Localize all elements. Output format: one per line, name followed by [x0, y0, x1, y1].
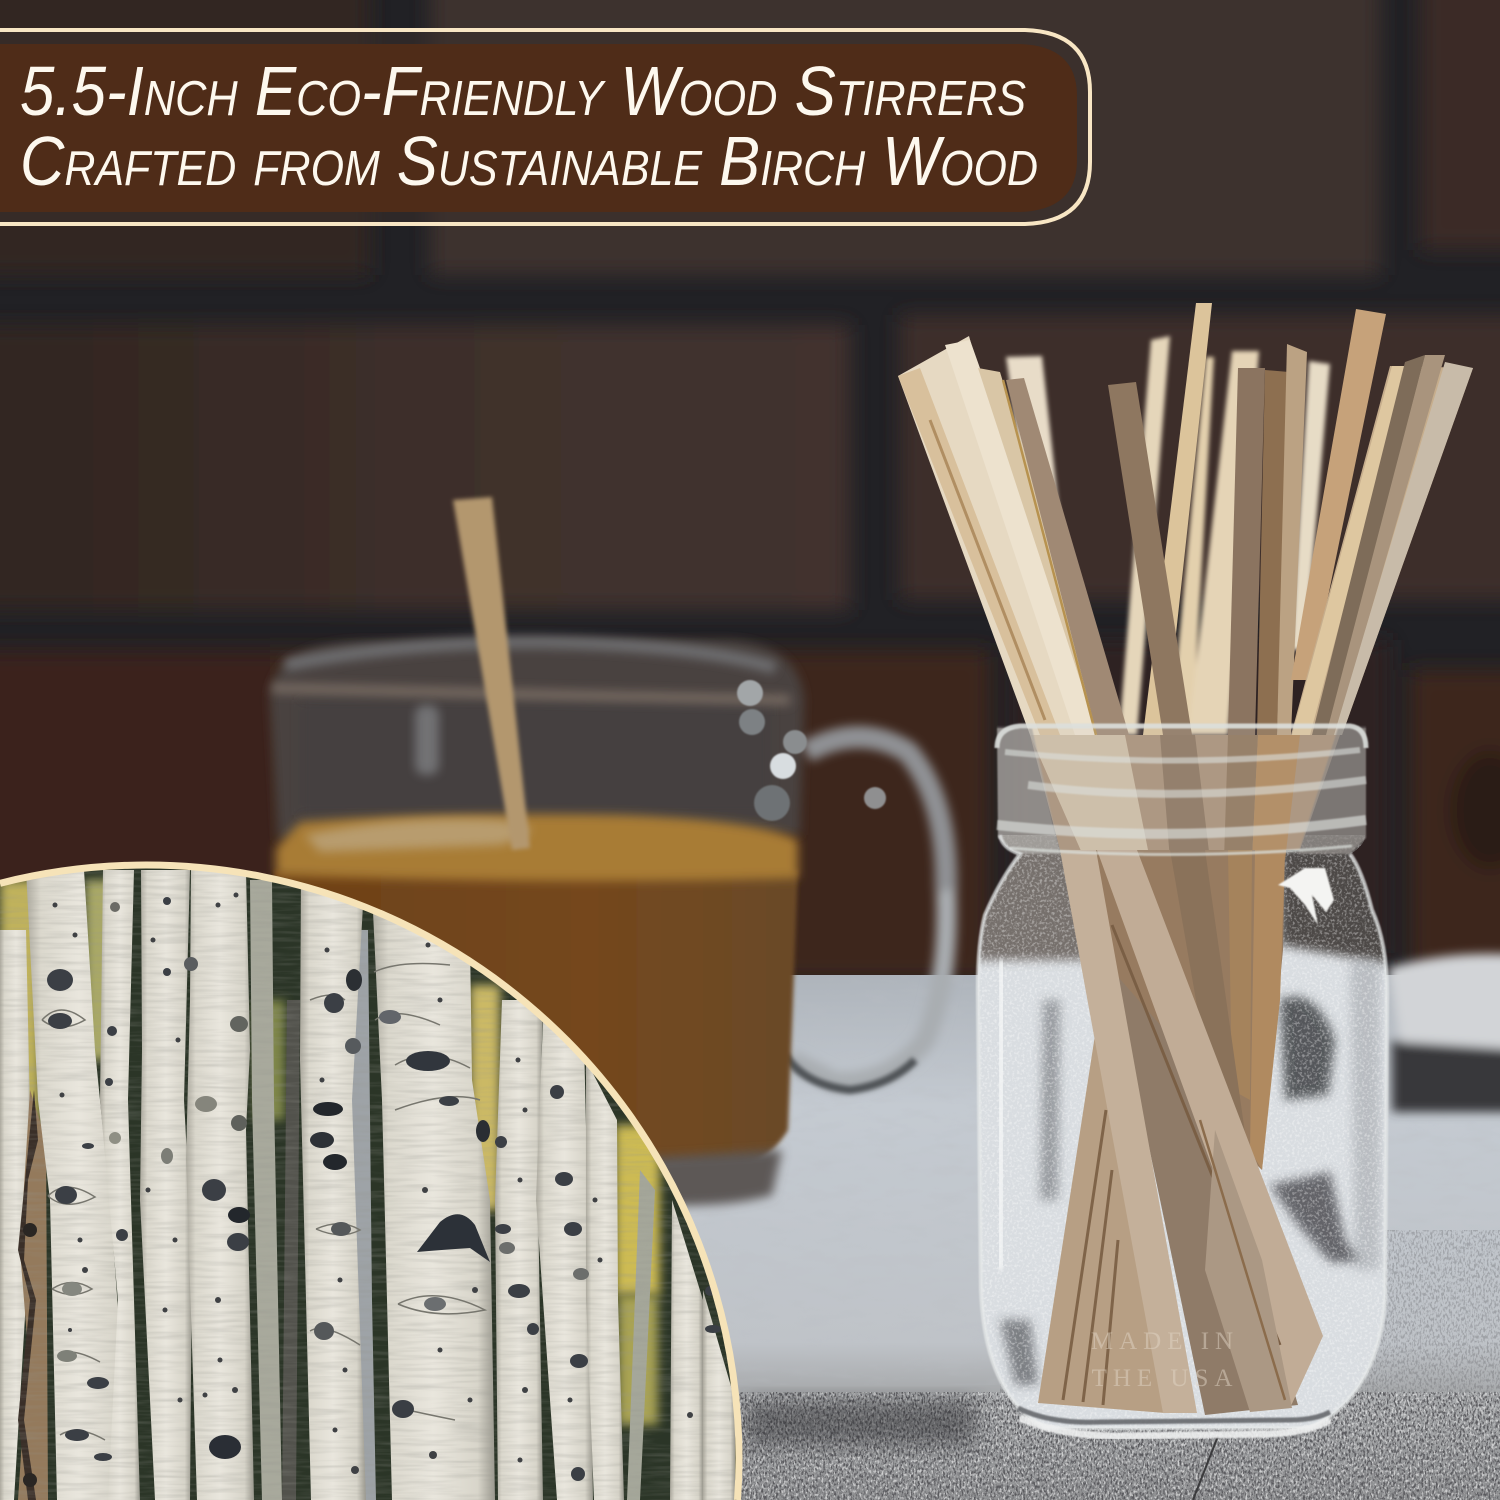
- title line 2: Crafted from Sustainable Birch Wood: [20, 122, 1038, 200]
- dark stick centre: [1108, 382, 1192, 735]
- birch knots: [23, 897, 721, 1487]
- tan tall stick: [1291, 309, 1386, 680]
- mug rim: [272, 642, 790, 700]
- jar outline: [978, 835, 1387, 1428]
- mason jar: [970, 726, 1400, 1440]
- plate on table: [1388, 954, 1500, 1112]
- background birch trunks: [0, 880, 655, 1500]
- bark dots: [52, 892, 693, 1474]
- title line 1: 5.5-Inch Eco-Friendly Wood Stirrers: [20, 52, 1026, 130]
- jar interior: [970, 830, 1400, 1440]
- coffee body: [274, 870, 798, 1165]
- left fanned sticks: [1038, 1035, 1165, 1413]
- glass sparkle: [970, 830, 1400, 1440]
- handle shadow line: [785, 1055, 915, 1090]
- jar right highlight: [1370, 980, 1374, 1260]
- refracted dark marks: [1000, 960, 1380, 1385]
- mug bokeh highlights: [737, 680, 886, 821]
- straight dark sticks: [1228, 368, 1265, 735]
- coffee foam: [305, 819, 530, 852]
- mug glass upper: [270, 640, 804, 840]
- birch inset cream border: [0, 865, 739, 1500]
- upper mass: [1060, 850, 1285, 1170]
- sticks seen through glass: [1030, 735, 1340, 1415]
- mug handle: [790, 737, 947, 1082]
- birch forest inset: [0, 860, 745, 1500]
- blurred back sticks: [1006, 336, 1330, 735]
- background: brick wall: [0, 0, 1500, 1000]
- embossed jar lettering: MADE IN: [1091, 1328, 1239, 1355]
- right stick bundle: [1291, 366, 1473, 735]
- banner fill: [0, 44, 1077, 212]
- white reflection: [1278, 868, 1334, 925]
- coffee surface: [276, 814, 798, 881]
- mug inner dark: [300, 700, 770, 815]
- peeled brown trunk: [18, 1090, 48, 1500]
- mug base: [640, 1150, 782, 1206]
- broad diagonal stick: [1097, 850, 1323, 1408]
- jar neck threads: [997, 726, 1366, 855]
- long front stick: [1060, 850, 1197, 1413]
- jar left highlight: [1000, 960, 1002, 1270]
- stirrers in jar: [898, 303, 1473, 735]
- left stick bundle: [898, 336, 1125, 735]
- neck sticks: [1030, 735, 1340, 850]
- neck glass: [997, 726, 1366, 854]
- glass background: [970, 830, 1400, 1440]
- wooden stirrer in mug: [453, 497, 530, 850]
- embossed jar lettering: [1091, 1328, 1239, 1392]
- glass mug with coffee: [270, 497, 947, 1206]
- mug reflection: [415, 705, 439, 775]
- jar base: [1018, 1408, 1330, 1436]
- background: wooden table: [600, 975, 1500, 1500]
- tall pale stick: [1143, 303, 1212, 735]
- title banner: [0, 30, 1090, 224]
- embossed jar lettering: THE USA: [1092, 1365, 1238, 1392]
- bark texture: [0, 860, 745, 1500]
- forest background: [0, 860, 745, 1500]
- banner outline: [0, 30, 1090, 224]
- dark stick left: [1006, 378, 1129, 735]
- title text: [20, 52, 1038, 200]
- white birch trunks: [26, 870, 735, 1500]
- dark crossing stick: [1112, 970, 1298, 1415]
- knot eye lines: [42, 964, 485, 1440]
- plank gap: [1193, 1436, 1218, 1500]
